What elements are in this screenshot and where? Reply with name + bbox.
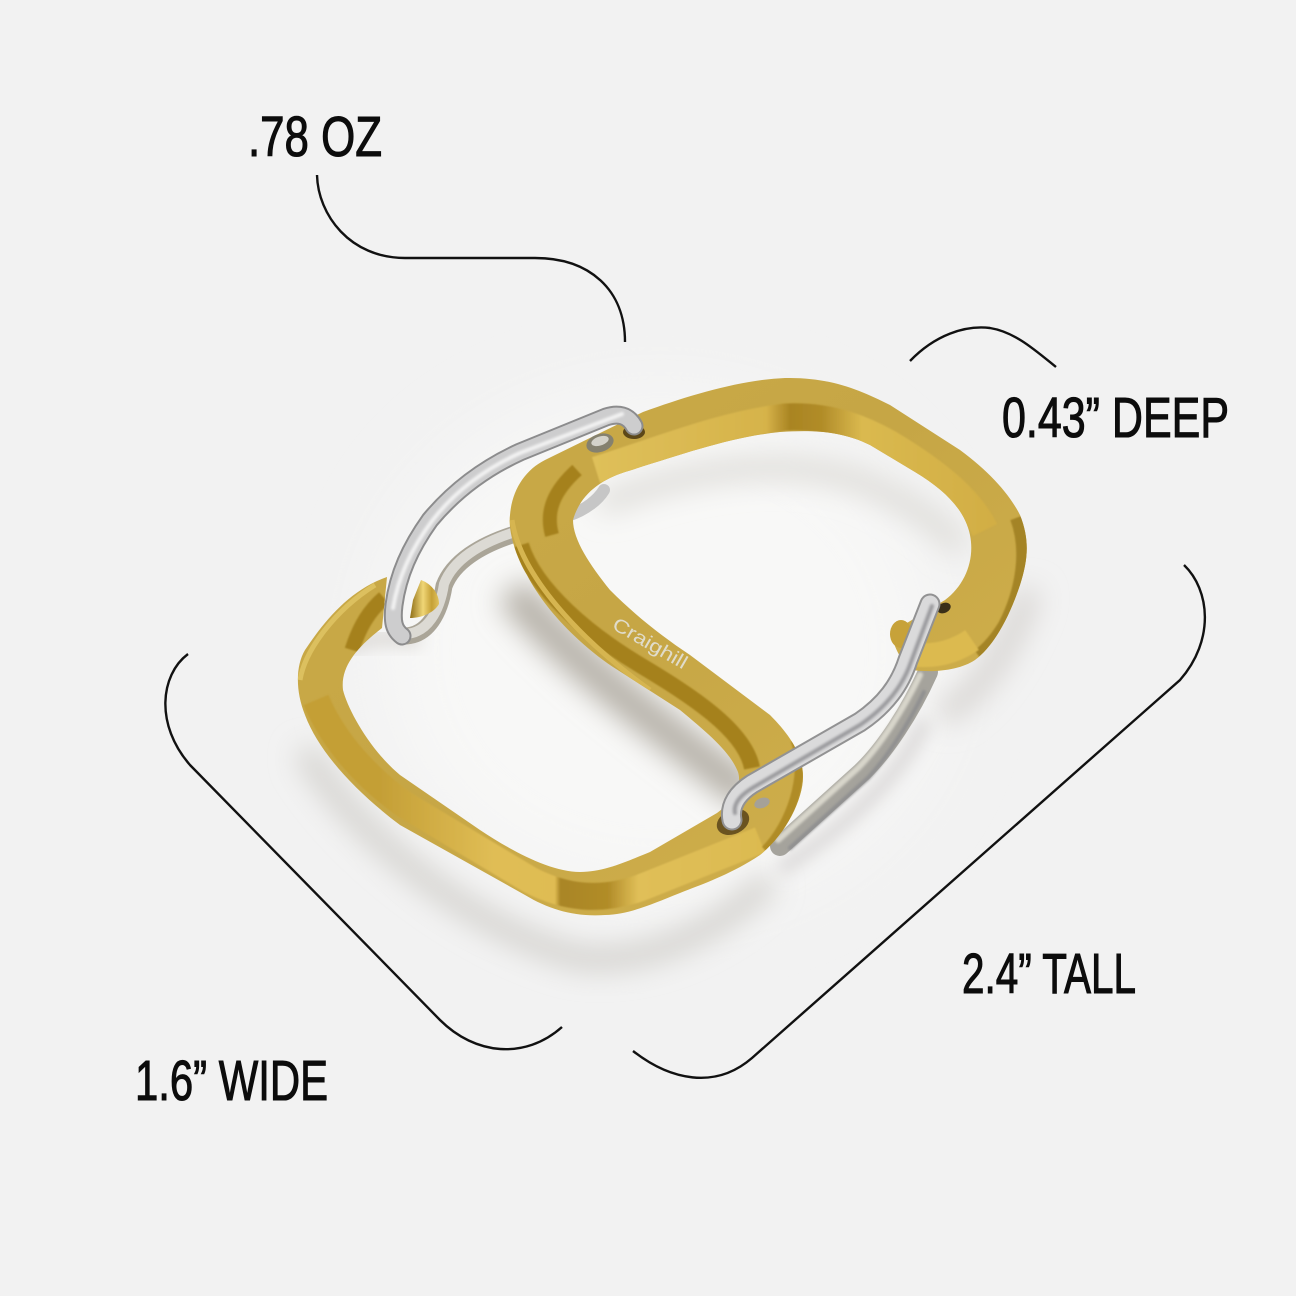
- product shadows: [305, 468, 1030, 959]
- hole: lower gate: [713, 804, 753, 840]
- label: weight: .78 OZ: [248, 105, 382, 169]
- rivet: gold cone: [410, 580, 439, 618]
- bracket: width: [165, 654, 562, 1049]
- label: width: 1.6” WIDE: [135, 1049, 328, 1113]
- bracket: weight: [317, 175, 625, 342]
- rivet: end knob: [890, 601, 952, 648]
- engraving: Craighill: Craighill: [608, 614, 691, 674]
- bracket: depth: [910, 327, 1056, 367]
- bevel facets: [300, 417, 1022, 896]
- carabiner body: [298, 378, 1027, 915]
- rivet: upper gate screw: [584, 425, 645, 456]
- wire gates, rear strands: [404, 490, 928, 848]
- label: height: 2.4” TALL: [962, 942, 1136, 1006]
- wire gates, front strands: [393, 414, 932, 820]
- bracket: height: [633, 565, 1205, 1078]
- label: depth: 0.43” DEEP: [1002, 386, 1229, 450]
